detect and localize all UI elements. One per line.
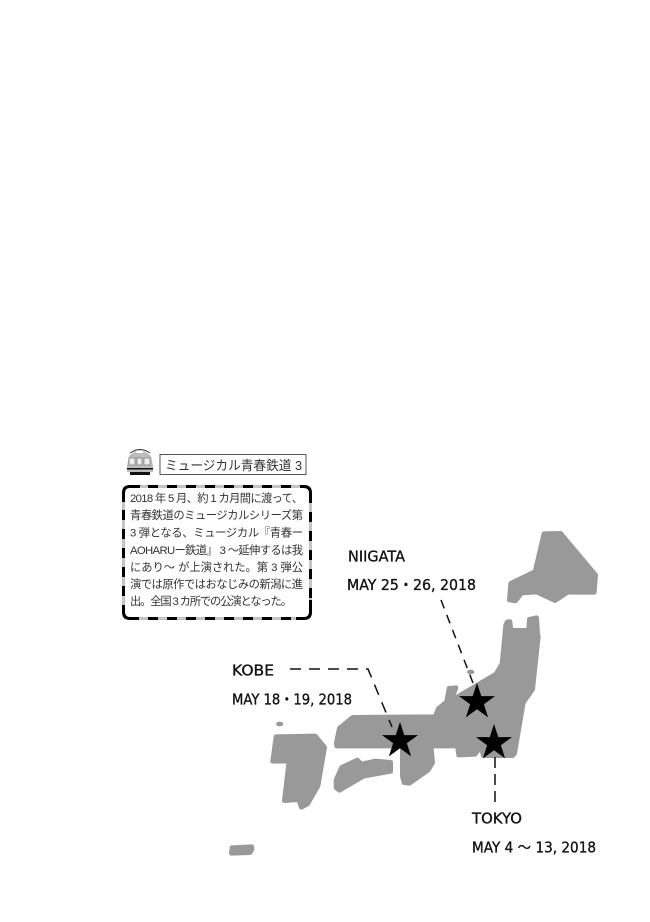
label: Tokyo: TOKYO	[471, 810, 522, 828]
text block: description body: 2018 年 5 月、約 1 カ月間に渡って、	[130, 491, 303, 505]
text block: description body: 青春鉄道のミュージカルシリーズ第	[130, 508, 303, 522]
text block: description body	[130, 491, 303, 608]
text block: description body: AOHARUー鉄道』 3 ～延伸するは我	[130, 543, 303, 557]
icon: star Tokyo	[476, 724, 512, 758]
map: Hokkaido	[509, 533, 596, 601]
label: Tokyo	[471, 810, 596, 856]
map: Shikoku	[336, 760, 391, 790]
heading: section title: ミュージカル青春鉄道 3	[165, 458, 302, 473]
text block: description body: にあり～ が上演された。第 3 弾公	[130, 560, 303, 574]
map: Okinawa	[231, 847, 252, 853]
label: Kobe	[232, 662, 352, 708]
label: Niigata: NIIGATA	[348, 548, 406, 566]
icon: train	[127, 450, 153, 475]
icon: star Niigata	[459, 683, 495, 717]
leader line: Tokyo	[494, 757, 496, 805]
text block: description body: 3 弾となる、ミュージカル『青春ー	[130, 526, 303, 540]
icon: star Kobe	[382, 722, 418, 756]
label: Kobe: MAY 18・19, 2018	[232, 690, 352, 708]
leader line: Niigata	[441, 600, 473, 683]
label: Kobe: KOBE	[232, 662, 274, 680]
text block: description body: 演では原作ではおなじみの新潟に進	[130, 578, 303, 591]
panel: description	[124, 486, 310, 618]
map: Japan	[231, 533, 596, 853]
map: Kyushu	[273, 736, 325, 807]
label: Niigata	[347, 548, 476, 594]
map: Sado island	[467, 670, 474, 674]
label: Niigata: MAY 25・26, 2018	[347, 576, 476, 594]
text block: description body: 出。全国 3 カ所での公演となった。	[130, 594, 292, 608]
leader line: Kobe	[290, 669, 392, 727]
label: Tokyo: MAY 4 ～ 13, 2018	[472, 838, 596, 856]
map: Oki island	[276, 722, 283, 726]
map: Honshu	[336, 618, 538, 783]
